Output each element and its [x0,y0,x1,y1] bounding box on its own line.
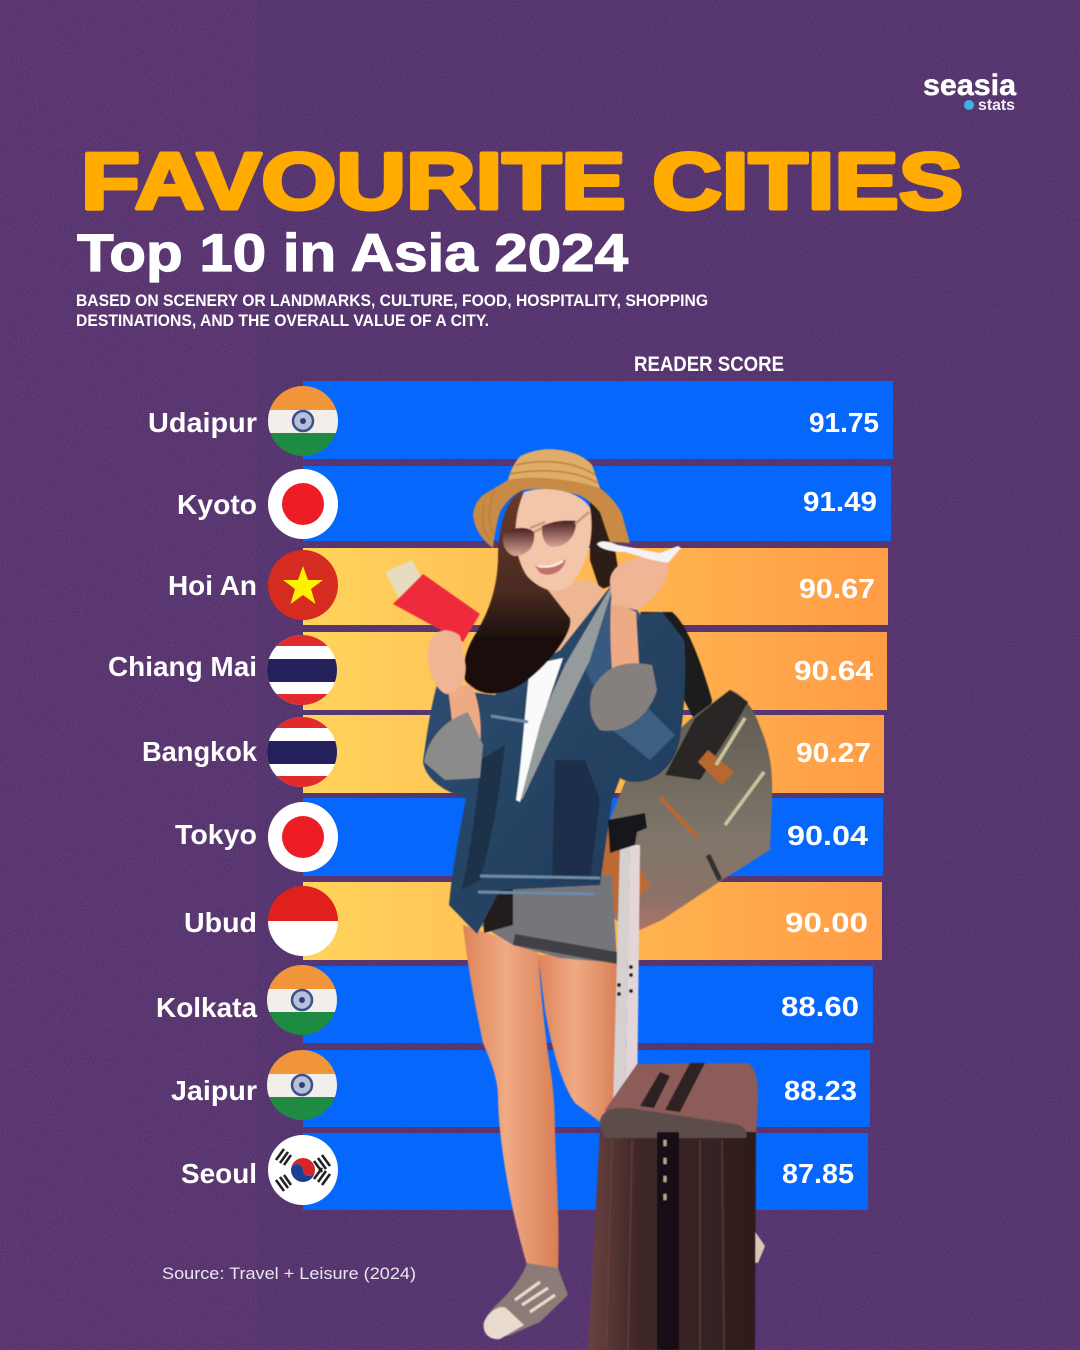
flag: India (Udaipur) [268,386,338,457]
axis label: reader score: READER SCORE [634,353,784,376]
score values: 90.04 [787,820,868,851]
city labels: Chiang Mai [108,651,257,682]
description text: DESTINATIONS, AND THE OVERALL VALUE OF A CITY. [76,311,489,330]
flag: Vietnam (Hoi An) [268,550,338,620]
score values [781,407,879,1189]
score values: 90.27 [796,737,871,768]
city labels [108,407,257,1189]
right sleeve cuff [590,663,657,731]
luggage handle [608,813,647,1107]
bar: Kyoto [303,466,891,541]
bar: Hoi An [303,548,888,625]
description text [76,291,708,330]
city labels: Bangkok [142,736,257,767]
bar: Bangkok [303,715,884,793]
city labels: Jaipur [171,1075,257,1106]
left sleeve cuff [424,712,483,780]
city labels: Seoul [181,1158,257,1189]
bar: Udaipur [303,381,893,459]
sneaker [484,1263,568,1339]
right forearm [610,600,640,690]
bar: Jaipur [303,1050,870,1127]
city labels: Hoi An [168,570,257,601]
score values: 87.85 [782,1158,854,1189]
sunglasses [503,512,589,556]
source note: Source: Travel + Leisure (2024) [162,1264,416,1283]
face [516,489,591,591]
score values: 90.67 [799,573,875,604]
subtitle: Top 10 in Asia 2024 [77,224,629,283]
bar: Chiang Mai [303,632,887,710]
red passport [393,574,480,642]
flag: South Korea (Seoul) [268,1135,338,1205]
bar: Ubud [303,882,882,960]
flag: Thailand (Chiang Mai) [267,635,337,705]
left forearm [447,685,481,755]
logo: seasia stats: seasia [923,69,1016,102]
city labels: Kolkata [156,992,257,1023]
score values: 88.60 [781,991,859,1022]
score values: 91.49 [803,486,877,517]
left leg [463,925,559,1270]
suitcase [588,1063,758,1350]
score values: 88.23 [784,1075,857,1106]
bar chart [303,381,893,1210]
traveller figure: woman with hat, backpack and suitcase [385,449,772,1350]
flag: Japan (Tokyo) [268,802,338,872]
backpack strap [640,612,712,740]
bar: Kolkata [303,966,873,1043]
right hand [610,556,668,610]
backpack [595,690,772,933]
left hand [428,630,466,694]
flag: India (Kolkata) [267,965,337,1036]
denim jacket [423,582,685,934]
ticket [385,560,428,604]
bar: Seoul [303,1133,868,1210]
title: FAVOURITE CITIES [81,136,963,226]
flag: India (Jaipur) [267,1050,337,1121]
description text: BASED ON SCENERY OR LANDMARKS, CULTURE, FOOD, HOSPITALITY, SHOPPING [76,291,708,310]
city labels: Kyoto [177,489,257,520]
flag: Indonesia (Ubud) [268,886,338,956]
city labels: Ubud [184,907,257,938]
straw hat [473,449,630,548]
logo: seasia stats: stats [978,97,1015,114]
score values: 90.64 [794,655,873,686]
bar: Tokyo [303,798,883,876]
right leg [538,955,620,1122]
flag: Thailand (Bangkok) [267,717,337,787]
city labels: Udaipur [148,407,257,438]
far shoe behind suitcase [752,1230,765,1263]
neck and chest [530,580,605,672]
flag: Japan (Kyoto) [268,469,338,539]
score values: 91.75 [809,407,879,438]
city labels: Tokyo [175,819,257,850]
smile [535,559,566,575]
hair behind [590,498,620,590]
score values: 90.00 [785,907,868,938]
shorts [480,875,617,964]
hair [464,490,570,693]
toy plane [597,541,681,563]
